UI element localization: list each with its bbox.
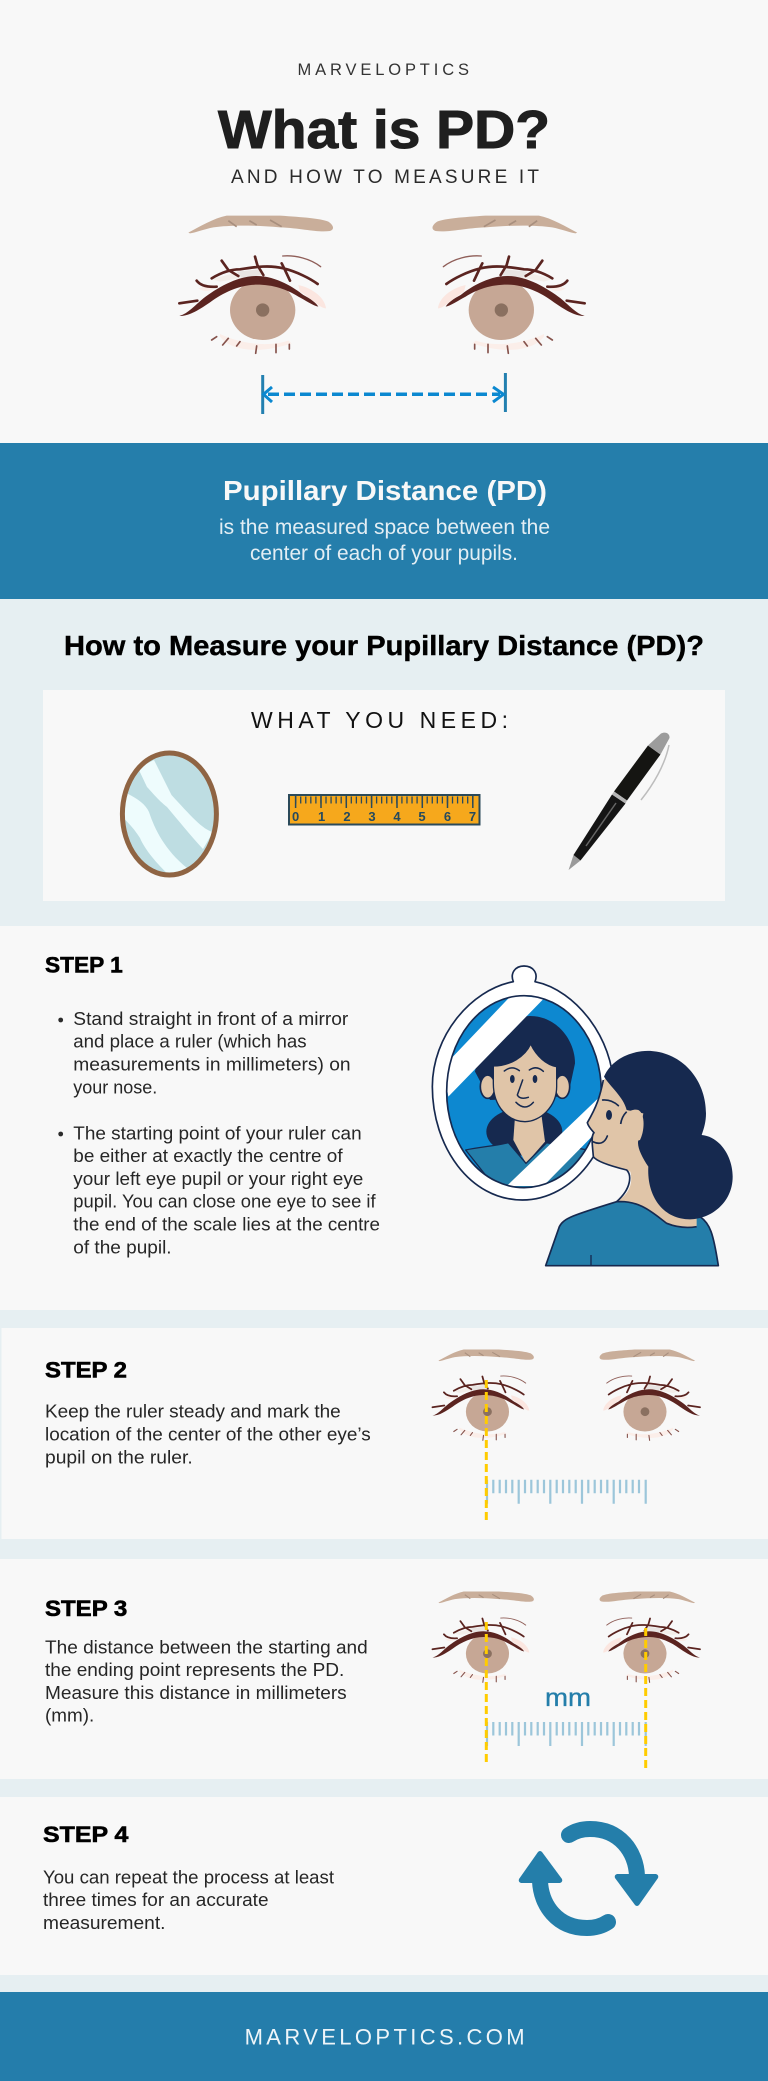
step 3 text: (mm). <box>45 1706 94 1726</box>
panel: step 4 <box>0 1797 768 1975</box>
mirror reflection <box>448 996 600 1187</box>
step 4 text: three times for an accurate <box>43 1890 268 1910</box>
what you need heading: WHAT YOU NEED: <box>251 707 508 733</box>
step 1 second bullet: be either at exactly the centre of <box>73 1146 344 1166</box>
step 1 second bullet: of the pupil. <box>73 1237 172 1257</box>
definition text: is the measured space between the <box>219 516 550 539</box>
step 3 text: the ending point represents the PD. <box>45 1660 344 1680</box>
step 4 heading: STEP 4 <box>43 1822 129 1847</box>
illustration: eyes with ruler scale <box>432 1349 700 1522</box>
icon: repeat arrows <box>519 1829 658 1928</box>
footer url: MARVELOPTICS.COM <box>245 2024 525 2049</box>
icon: ruler: 2 <box>343 809 351 824</box>
icon: ruler: 1 <box>318 809 325 824</box>
step 1 second bullet: The starting point of your ruler can <box>73 1123 362 1143</box>
step 3 text <box>45 1637 368 1726</box>
icon: mirror <box>120 753 216 876</box>
panel: what you need <box>43 690 725 901</box>
illustration: eyes with measurement: mm <box>545 1684 591 1712</box>
icon: ruler: 0 <box>292 809 299 824</box>
step 1 second bullet: your left eye pupil or your right eye <box>73 1169 363 1189</box>
step 1 first bullet: measurements in millimeters) on <box>73 1055 351 1075</box>
step 2 text: Keep the ruler steady and mark the <box>45 1402 341 1422</box>
step 1 first bullet: and place a ruler (which has <box>73 1032 307 1052</box>
step 2 heading: STEP 2 <box>45 1358 127 1383</box>
icon: ruler: 7 <box>469 809 476 824</box>
brand label: MARVELOPTICS <box>298 61 469 79</box>
icon: ruler <box>289 795 480 824</box>
step 3 heading: STEP 3 <box>45 1596 127 1621</box>
mirror frame <box>432 966 613 1200</box>
illustration: woman looking in mirror <box>432 966 733 1266</box>
step 4 text: You can repeat the process at least <box>43 1867 334 1887</box>
step 1 second bullet: the end of the scale lies at the centre <box>73 1215 380 1235</box>
step 4 text <box>43 1867 334 1933</box>
title: What is PD? <box>218 100 550 160</box>
definition text <box>219 516 550 565</box>
definition text: center of each of your pupils. <box>250 542 518 565</box>
icon: ruler: 4 <box>393 809 401 824</box>
subtitle: AND HOW TO MEASURE IT <box>231 167 539 188</box>
step 1 second bullet <box>58 1123 380 1257</box>
icon: ruler: 6 <box>444 809 451 824</box>
illustration: eyes with measurement <box>432 1591 700 1768</box>
step 1 first bullet: Stand straight in front of a mirror <box>73 1009 348 1029</box>
step 2 text: location of the center of the other eye’s <box>45 1425 371 1445</box>
definition heading: Pupillary Distance (PD) <box>223 475 547 506</box>
step 3 text: The distance between the starting and <box>45 1637 368 1657</box>
step 2 text: pupil on the ruler. <box>45 1447 193 1467</box>
footer band <box>0 1992 768 2081</box>
panel: definition band <box>0 443 768 599</box>
panel: header <box>0 0 768 443</box>
arrow: pupillary distance <box>263 373 505 414</box>
icon: pair of eyes <box>179 216 585 353</box>
step 1 second bullet: pupil. You can close one eye to see if <box>73 1192 377 1212</box>
icon: pen <box>569 733 670 870</box>
icon: ruler: 5 <box>418 809 426 824</box>
icon: ruler: 3 <box>368 809 376 824</box>
panel: step 2 <box>2 1328 768 1539</box>
step 1 heading: STEP 1 <box>45 953 123 978</box>
step 1 first bullet <box>58 1009 351 1097</box>
step 4 text: measurement. <box>43 1913 166 1933</box>
woman <box>546 1202 718 1266</box>
step 1 first bullet: your nose. <box>73 1077 157 1097</box>
step 3 text: Measure this distance in millimeters <box>45 1683 347 1703</box>
panel: step 3 <box>0 1559 768 1779</box>
step 2 text <box>45 1402 371 1467</box>
panel: step 1 <box>0 926 768 1310</box>
heading: how to measure: How to Measure your Pupillary Distance (PD)? <box>64 630 704 661</box>
